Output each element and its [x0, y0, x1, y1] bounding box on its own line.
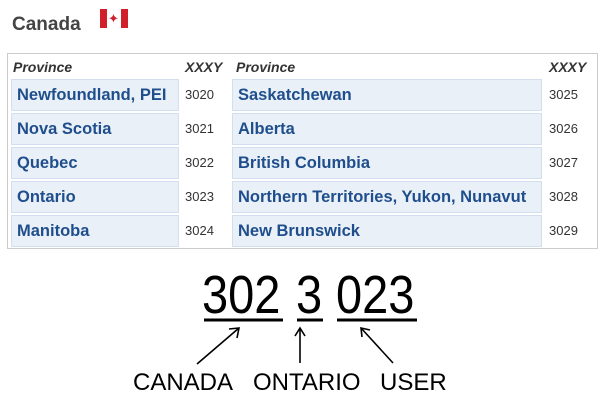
- table: province codes: British Columbia: [238, 154, 370, 172]
- table: province codes: Ontario: [17, 188, 76, 206]
- table: province codes: XXXY: [185, 59, 222, 75]
- table: province codes: 3028: [549, 189, 578, 204]
- text: USER: [380, 369, 447, 396]
- table: province codes: 3020: [185, 87, 214, 102]
- table: province codes: [7, 53, 598, 249]
- table: province codes: 3022: [185, 155, 214, 170]
- table: province codes: 3026: [549, 121, 578, 136]
- table: province codes: 3029: [549, 223, 578, 238]
- title: Canada: [12, 14, 81, 35]
- icon: canada flag: [100, 9, 128, 28]
- table: province codes: 3021: [185, 121, 214, 136]
- table: province codes: Alberta: [238, 120, 295, 138]
- code breakdown: 023: [336, 264, 414, 324]
- rows: Newfoundland, PEI: [17, 86, 166, 104]
- table: province codes: 3024: [185, 223, 214, 238]
- table: province codes: Northern Territories, Yukon, Nunavut: [238, 188, 526, 206]
- table: province codes: 3027: [549, 155, 578, 170]
- table: province codes: Quebec: [17, 154, 78, 172]
- table: province codes: Saskatchewan: [238, 86, 352, 104]
- header: Province: [13, 59, 72, 75]
- code breakdown: [202, 264, 414, 324]
- icon: canada flag: ✦: [108, 11, 119, 26]
- table: province codes: 3025: [549, 87, 578, 102]
- table: province codes: 3023: [185, 189, 214, 204]
- labels: CANADA: [133, 369, 233, 396]
- table: province codes: XXXY: [549, 59, 586, 75]
- table: province codes: New Brunswick: [238, 222, 360, 240]
- code breakdown: 302: [202, 264, 280, 324]
- table: province codes: Nova Scotia: [17, 120, 111, 138]
- rows: [11, 79, 179, 111]
- text: ONTARIO: [253, 369, 361, 396]
- code breakdown: 3: [296, 264, 322, 324]
- table: province codes: Province: [236, 59, 295, 75]
- table: province codes: Manitoba: [17, 222, 89, 240]
